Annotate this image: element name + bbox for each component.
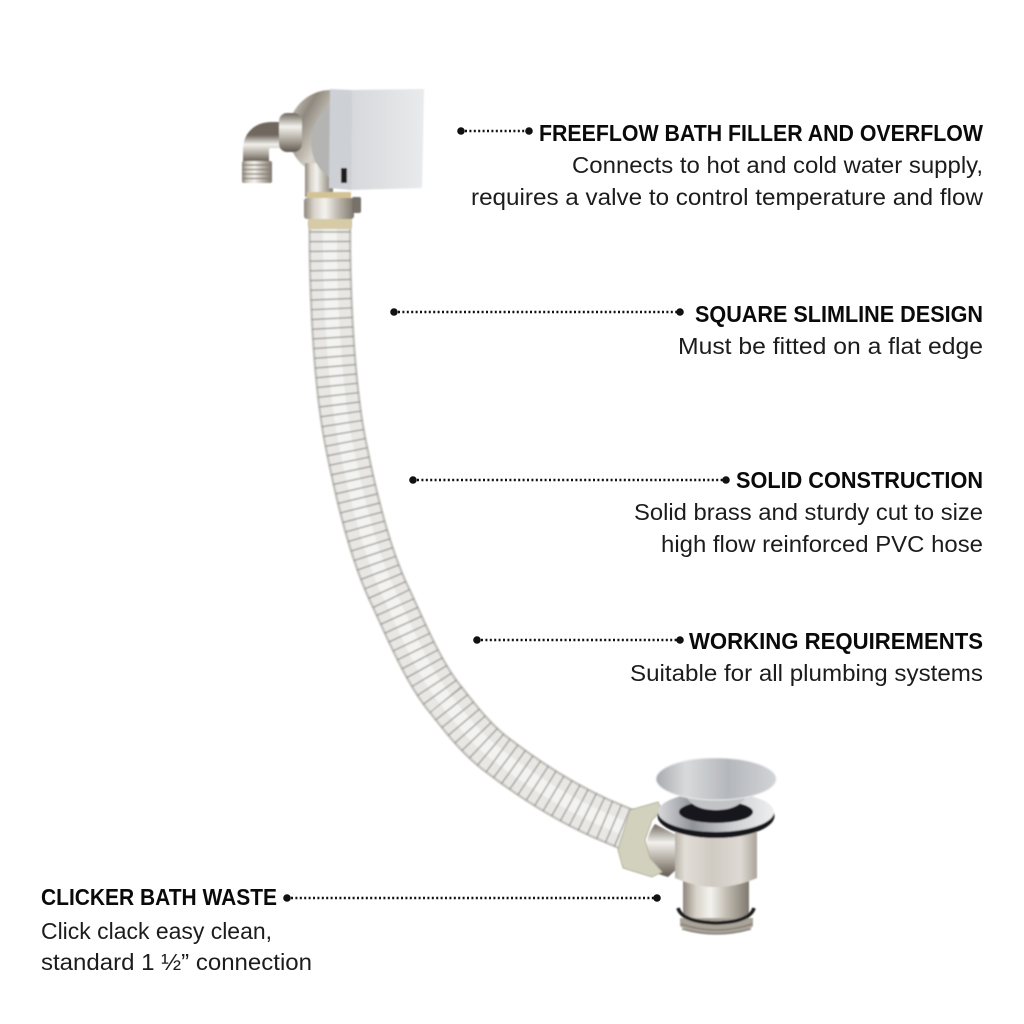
callout: freeflow bath filler: Connects to hot and cold water supply, <box>572 152 983 178</box>
neck to hose <box>646 824 678 877</box>
callout: clicker bath waste: Click clack easy clean, <box>41 918 272 944</box>
flange recess <box>679 801 753 823</box>
square cover front <box>351 89 424 190</box>
callout: square slimline design <box>390 301 983 359</box>
square cover side <box>329 89 352 190</box>
callout: working requirements: Suitable for all plumbing systems <box>630 660 983 686</box>
o-ring <box>678 908 754 923</box>
callout: solid construction: high flow reinforced PVC hose <box>661 531 983 557</box>
hose clamp <box>304 198 354 219</box>
lower barrel <box>683 880 749 918</box>
threaded end <box>242 161 272 183</box>
black seal <box>658 794 774 838</box>
callout: clicker bath waste: CLICKER BATH WASTE <box>41 884 277 910</box>
callout: solid construction: Solid brass and sturdy cut to size <box>634 499 983 525</box>
elbow pipe <box>256 135 288 162</box>
silver disc <box>311 98 399 186</box>
callout: solid construction <box>409 467 983 557</box>
callout: freeflow bath filler: FREEFLOW BATH FILLER AND OVERFLOW <box>539 120 983 146</box>
main barrel <box>675 832 757 887</box>
brass bands <box>307 192 351 199</box>
cap stem <box>684 790 748 810</box>
callout: freeflow bath filler: requires a valve to control temperature and flow <box>471 184 983 210</box>
cap <box>656 758 776 800</box>
union nut <box>618 802 662 877</box>
neck <box>305 163 333 197</box>
callout: square slimline design: SQUARE SLIMLINE DESIGN <box>695 301 983 327</box>
callout: clicker bath waste: standard 1 ½” connection <box>41 949 312 975</box>
callout: square slimline design: Must be fitted on a flat edge <box>678 333 983 359</box>
callout: freeflow bath filler <box>457 120 983 210</box>
callout: clicker bath waste <box>41 884 661 975</box>
slot <box>341 168 347 183</box>
icon: clicker bath waste <box>618 758 776 934</box>
thread <box>680 918 753 934</box>
callout: working requirements <box>473 628 983 686</box>
hose <box>330 212 640 835</box>
collar <box>279 113 302 152</box>
callout: solid construction: SOLID CONSTRUCTION <box>736 467 983 493</box>
callout: working requirements: WORKING REQUIREMENTS <box>689 628 983 654</box>
icon: bath filler fitting <box>242 89 424 229</box>
flange <box>658 792 774 832</box>
round body <box>288 90 332 168</box>
